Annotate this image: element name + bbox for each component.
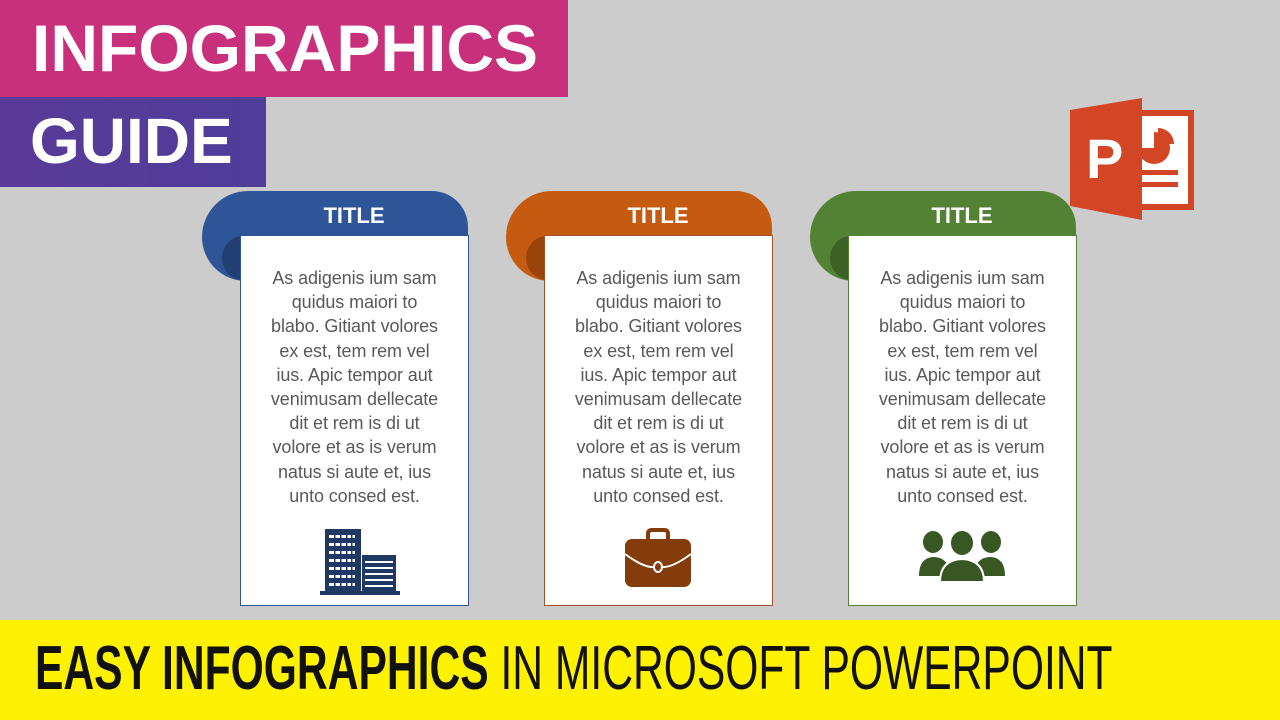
- text block 3: ius. Apic tempor aut: [884, 365, 1041, 385]
- text block 1: As adigenis ium sam: [272, 268, 437, 288]
- text block 3: ex est, tem rem vel: [887, 341, 1038, 361]
- heading: title 1: TITLE: [323, 203, 385, 228]
- text block 3: natus si aute et, ius: [886, 462, 1039, 482]
- text block 3: venimusam dellecate: [879, 389, 1046, 409]
- panel: card 3 (green): [810, 191, 1077, 606]
- icon: building: [320, 529, 400, 595]
- text block 2: ex est, tem rem vel: [583, 341, 734, 361]
- text block 3: dit et rem is di ut: [897, 413, 1028, 433]
- panel: card 2 (orange): [506, 191, 773, 606]
- text block 2: quidus maiori to: [596, 292, 721, 312]
- icon: PowerPoint logo: [1070, 98, 1194, 220]
- text block 1: venimusam dellecate: [271, 389, 438, 409]
- text block 1: ex est, tem rem vel: [279, 341, 430, 361]
- text block 1: [271, 268, 438, 506]
- text block 2: natus si aute et, ius: [582, 462, 735, 482]
- footer banner: [0, 620, 1280, 720]
- text block 2: venimusam dellecate: [575, 389, 742, 409]
- text block 3: volore et as is verum: [881, 437, 1044, 457]
- banner: GUIDE: [0, 97, 266, 187]
- text block 2: blabo. Gitiant volores: [575, 316, 742, 336]
- footer text: EASY INFOGRAPHICS IN MICROSOFT POWERPOINT: [35, 634, 1113, 703]
- text block 2: unto consed est.: [593, 486, 724, 506]
- text block 3: blabo. Gitiant volores: [879, 316, 1046, 336]
- text block 1: ius. Apic tempor aut: [276, 365, 433, 385]
- heading: title 3: TITLE: [931, 203, 993, 228]
- text block 2: ius. Apic tempor aut: [580, 365, 737, 385]
- text block 2: [575, 268, 742, 506]
- banner: INFOGRAPHICS: INFOGRAPHICS: [32, 11, 538, 85]
- heading: title 2: TITLE: [627, 203, 689, 228]
- text block 3: unto consed est.: [897, 486, 1028, 506]
- text block 1: volore et as is verum: [273, 437, 436, 457]
- text block 2: dit et rem is di ut: [593, 413, 724, 433]
- icon: PowerPoint logo: P: [1086, 127, 1123, 190]
- text block 3: quidus maiori to: [900, 292, 1025, 312]
- text block 2: volore et as is verum: [577, 437, 740, 457]
- text block 1: quidus maiori to: [292, 292, 417, 312]
- banner: INFOGRAPHICS: [0, 0, 568, 97]
- banner: GUIDE: GUIDE: [30, 105, 233, 177]
- panel: card 1 (blue): [202, 191, 469, 606]
- icon: briefcase: [625, 528, 691, 587]
- text block 1: blabo. Gitiant volores: [271, 316, 438, 336]
- text block 1: dit et rem is di ut: [289, 413, 420, 433]
- text block 3: [879, 268, 1046, 506]
- text block 1: natus si aute et, ius: [278, 462, 431, 482]
- text block 3: As adigenis ium sam: [880, 268, 1045, 288]
- icon: people: [919, 531, 1005, 581]
- text block 2: As adigenis ium sam: [576, 268, 741, 288]
- text block 1: unto consed est.: [289, 486, 420, 506]
